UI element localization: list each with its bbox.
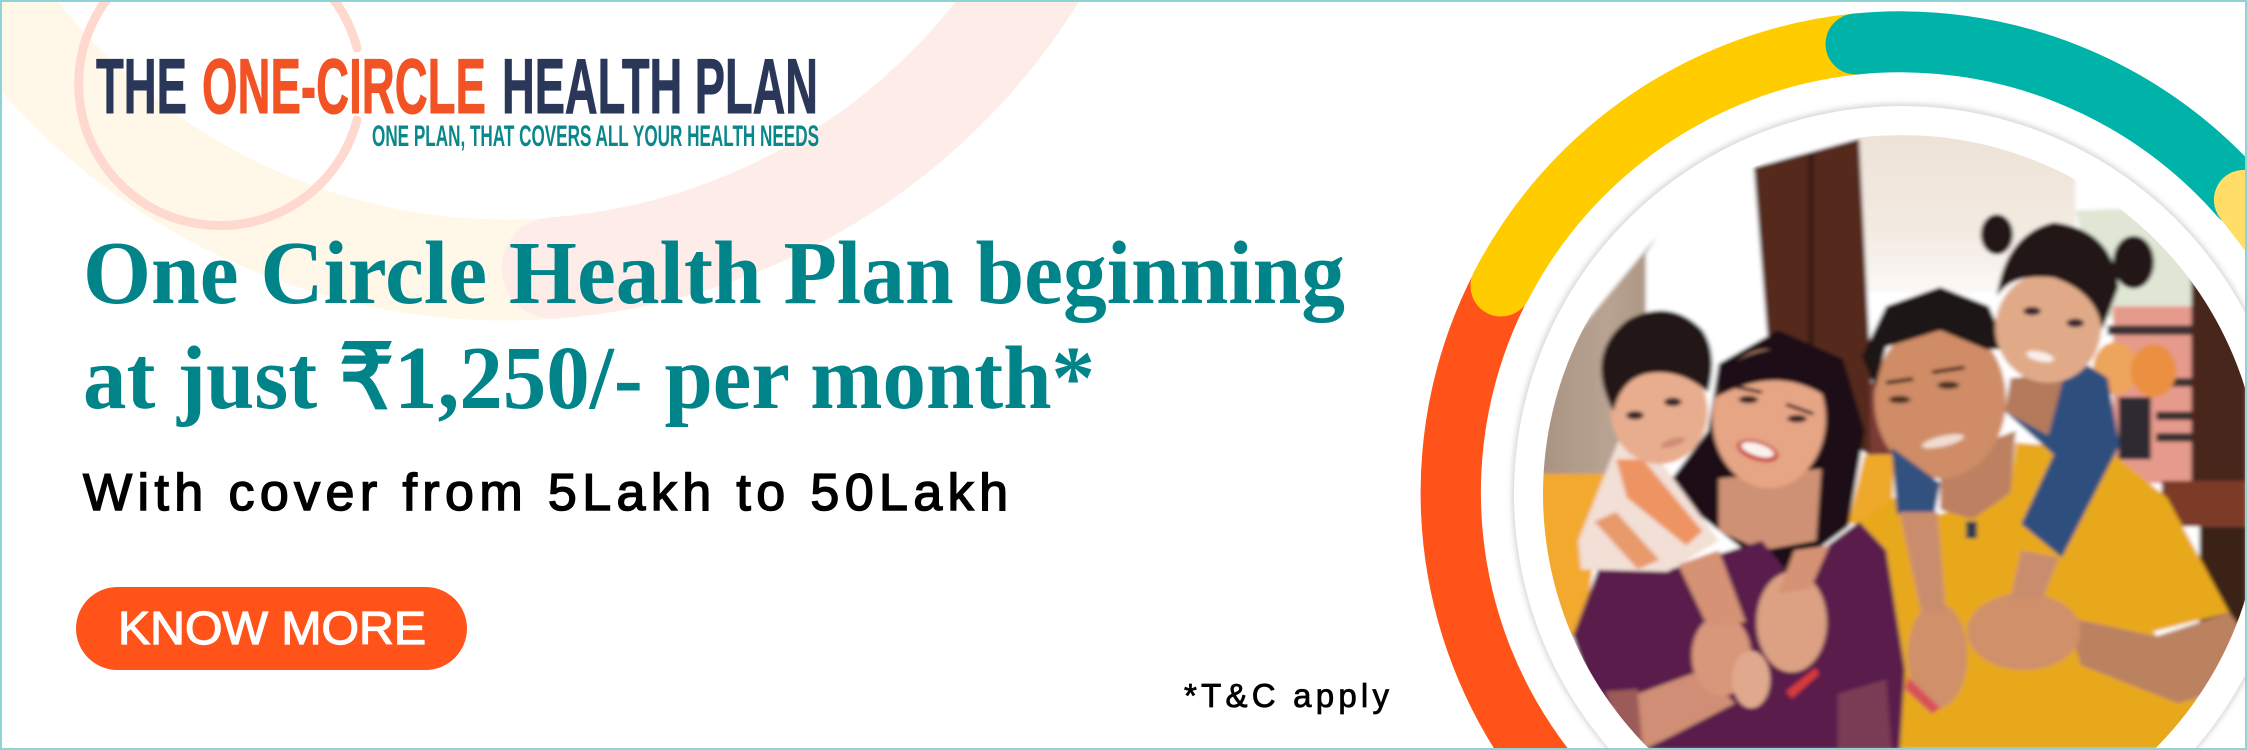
woman face features — [1734, 387, 1813, 466]
family photo in circle — [1535, 134, 2247, 750]
logo tagline: ONE PLAN, THAT COVERS ALL YOUR HEALTH NEEDS — [372, 120, 819, 153]
girl — [1892, 214, 2154, 612]
photo background — [1535, 134, 2247, 636]
subheading: With cover from 5Lakh to 50Lakh — [83, 464, 1008, 522]
logo title: THE — [96, 42, 187, 130]
boy — [1578, 311, 1719, 572]
terms note: *T&C apply — [1184, 677, 1390, 714]
logo title: ONE-CIRCLE — [202, 42, 486, 130]
man face features — [1886, 367, 1965, 451]
background decorative pale arcs — [0, 0, 1129, 270]
button: know more: KNOW MORE — [118, 602, 426, 654]
headline: One Circle Health Plan beginning — [83, 224, 1345, 323]
headline: at just ₹1,250/- per month* — [83, 329, 1095, 428]
logo title — [96, 42, 818, 130]
colored circular ring — [1421, 42, 2247, 750]
woman — [1573, 330, 1905, 750]
man — [1859, 287, 2247, 750]
logo title: HEALTH PLAN — [502, 42, 818, 130]
inner white disc with soft shadow — [1512, 104, 2247, 750]
logo: The One-Circle Health Plan — [96, 42, 819, 153]
button: know more — [76, 587, 467, 670]
headline — [83, 224, 1345, 428]
